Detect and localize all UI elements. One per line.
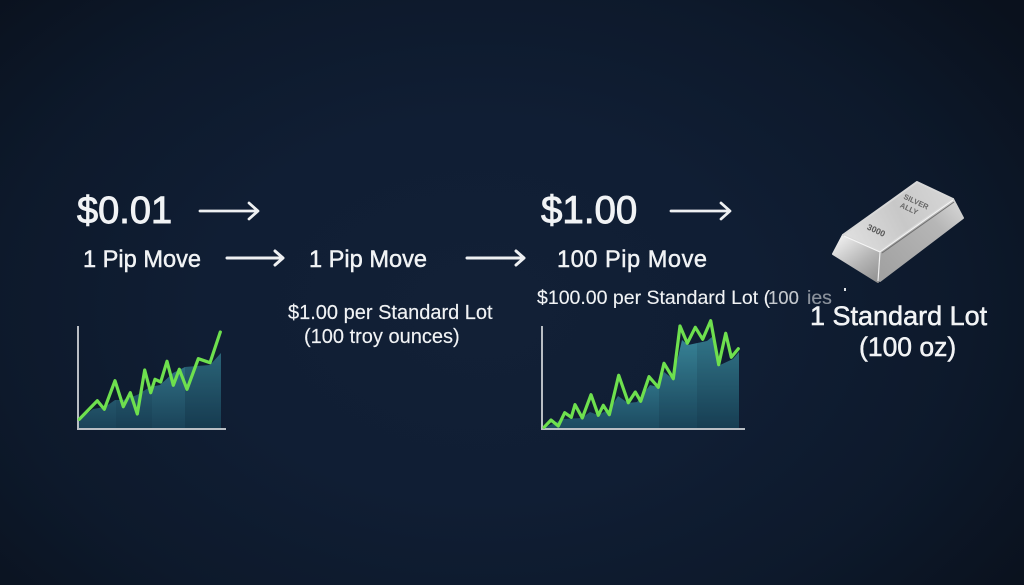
text: $100.00 per standard lot, partly faded: ies [807, 287, 832, 309]
engraving: bar text: 3000 [866, 222, 887, 239]
label: 1 standard lot: 1 Standard Lot [810, 301, 988, 331]
mark: stray speck [844, 288, 846, 291]
text: $100.00 per standard lot, partly faded: $100.00 per Standard Lot ( [537, 287, 771, 309]
arrow: second pip move to 100 pip move [467, 251, 524, 265]
engraving: bar text: SILVER [902, 192, 931, 212]
text: $1.00 per standard lot [288, 302, 493, 348]
text: $100.00 per standard lot, partly faded: 100 [768, 287, 799, 308]
chart: small pip move [78, 326, 226, 429]
label: 100 Pip Move: 100 Pip Move [557, 247, 707, 273]
engraving: bar text [866, 192, 931, 239]
label: second 1 Pip Move: 1 Pip Move [309, 247, 427, 273]
icon: silver bar [833, 182, 963, 282]
label: first 1 Pip Move: 1 Pip Move [83, 247, 201, 273]
arrow: first pip move to second [227, 251, 283, 265]
chart: 100 pip move [542, 321, 745, 429]
arrow: $1.00 onward [671, 203, 730, 219]
engraving: bar text: ALLY [899, 201, 920, 217]
arrow: $0.01 onward [200, 203, 258, 219]
label: 1 standard lot: (100 oz) [859, 332, 956, 362]
price: $0.01: $0.01 [77, 190, 172, 232]
text: $1.00 per standard lot: $1.00 per Standard Lot [288, 302, 493, 324]
price: $1.00: $1.00 [541, 189, 637, 232]
label: 1 standard lot [810, 301, 988, 362]
text: $1.00 per standard lot: (100 troy ounces) [304, 326, 460, 348]
